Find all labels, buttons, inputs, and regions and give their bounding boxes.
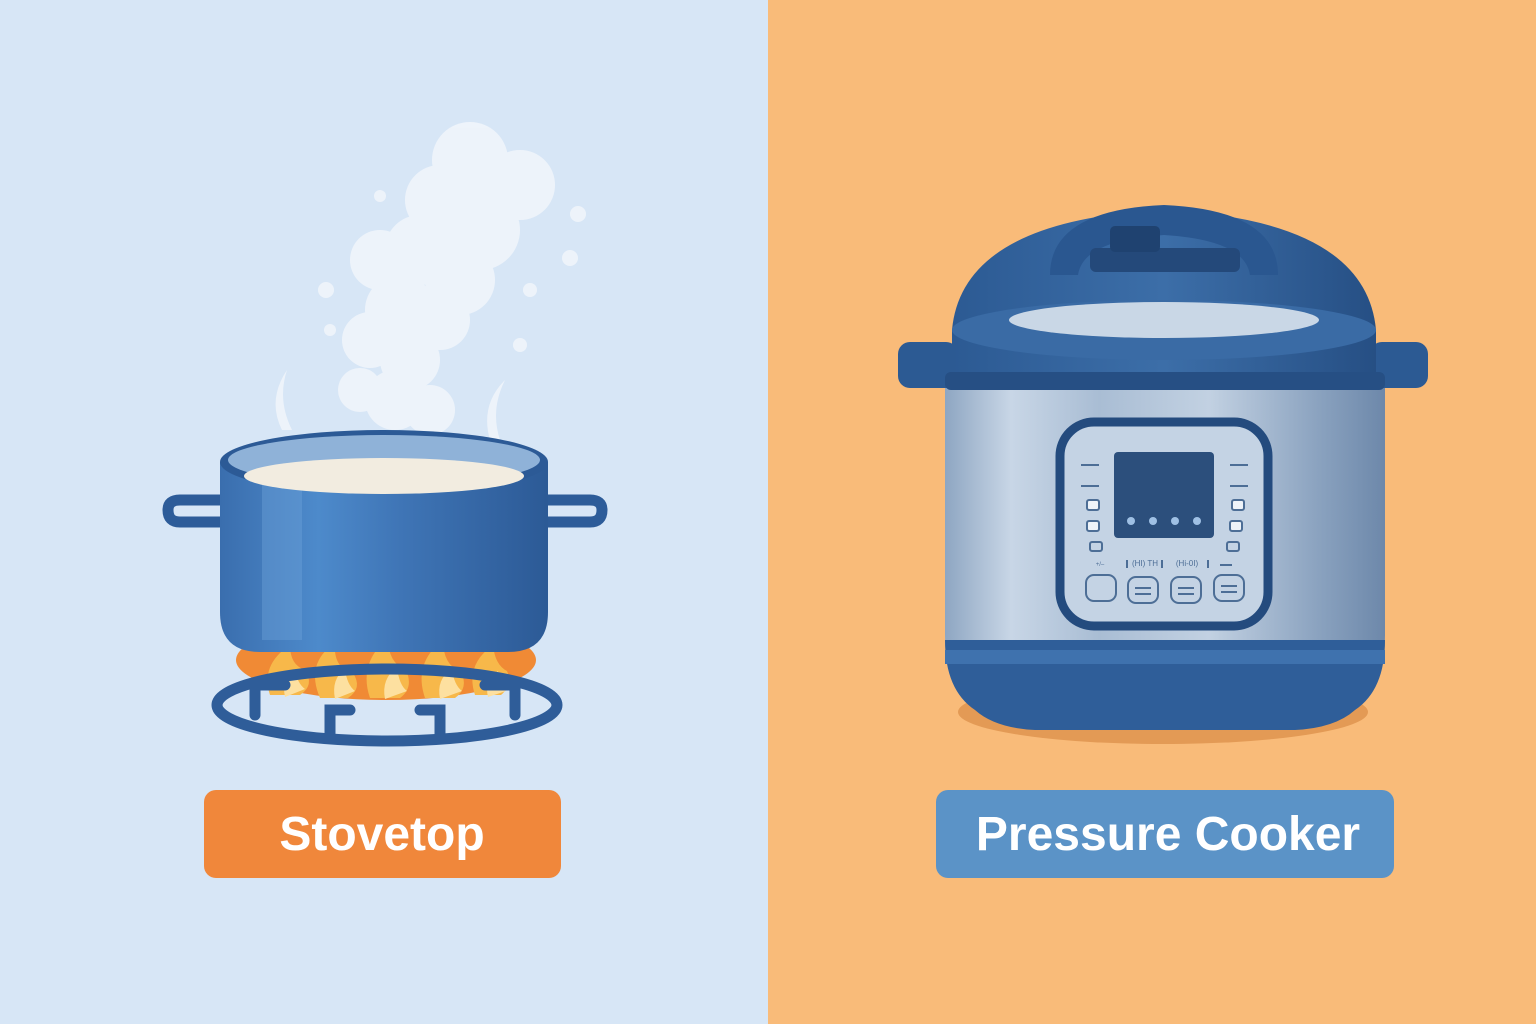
flames [236, 620, 536, 700]
control panel: (HI) TH [1132, 559, 1158, 568]
pot rim and rice [220, 430, 548, 494]
shadow [958, 680, 1368, 744]
steam cloud [276, 122, 586, 440]
background: left panel [0, 0, 768, 1024]
label: Pressure Cooker [936, 790, 1394, 878]
lid [952, 210, 1376, 388]
control panel: (Hi-0I) [1176, 559, 1198, 568]
illustration: stovetop pot [168, 122, 602, 741]
illustration: pressure cooker [898, 205, 1428, 744]
label: Stovetop: Stovetop [279, 808, 485, 861]
display [1114, 452, 1214, 538]
label: Pressure Cooker: Pressure Cooker [976, 808, 1360, 861]
side handles [898, 342, 958, 388]
base band [945, 640, 1385, 730]
pot body [220, 462, 548, 652]
burner grate [217, 669, 557, 741]
control panel [1060, 422, 1268, 626]
label: Stovetop [204, 790, 561, 878]
lid handle [1050, 205, 1278, 275]
body [945, 385, 1385, 715]
background: right panel [768, 0, 1536, 1024]
control panel: +/– [1096, 562, 1105, 568]
handles [168, 500, 602, 522]
